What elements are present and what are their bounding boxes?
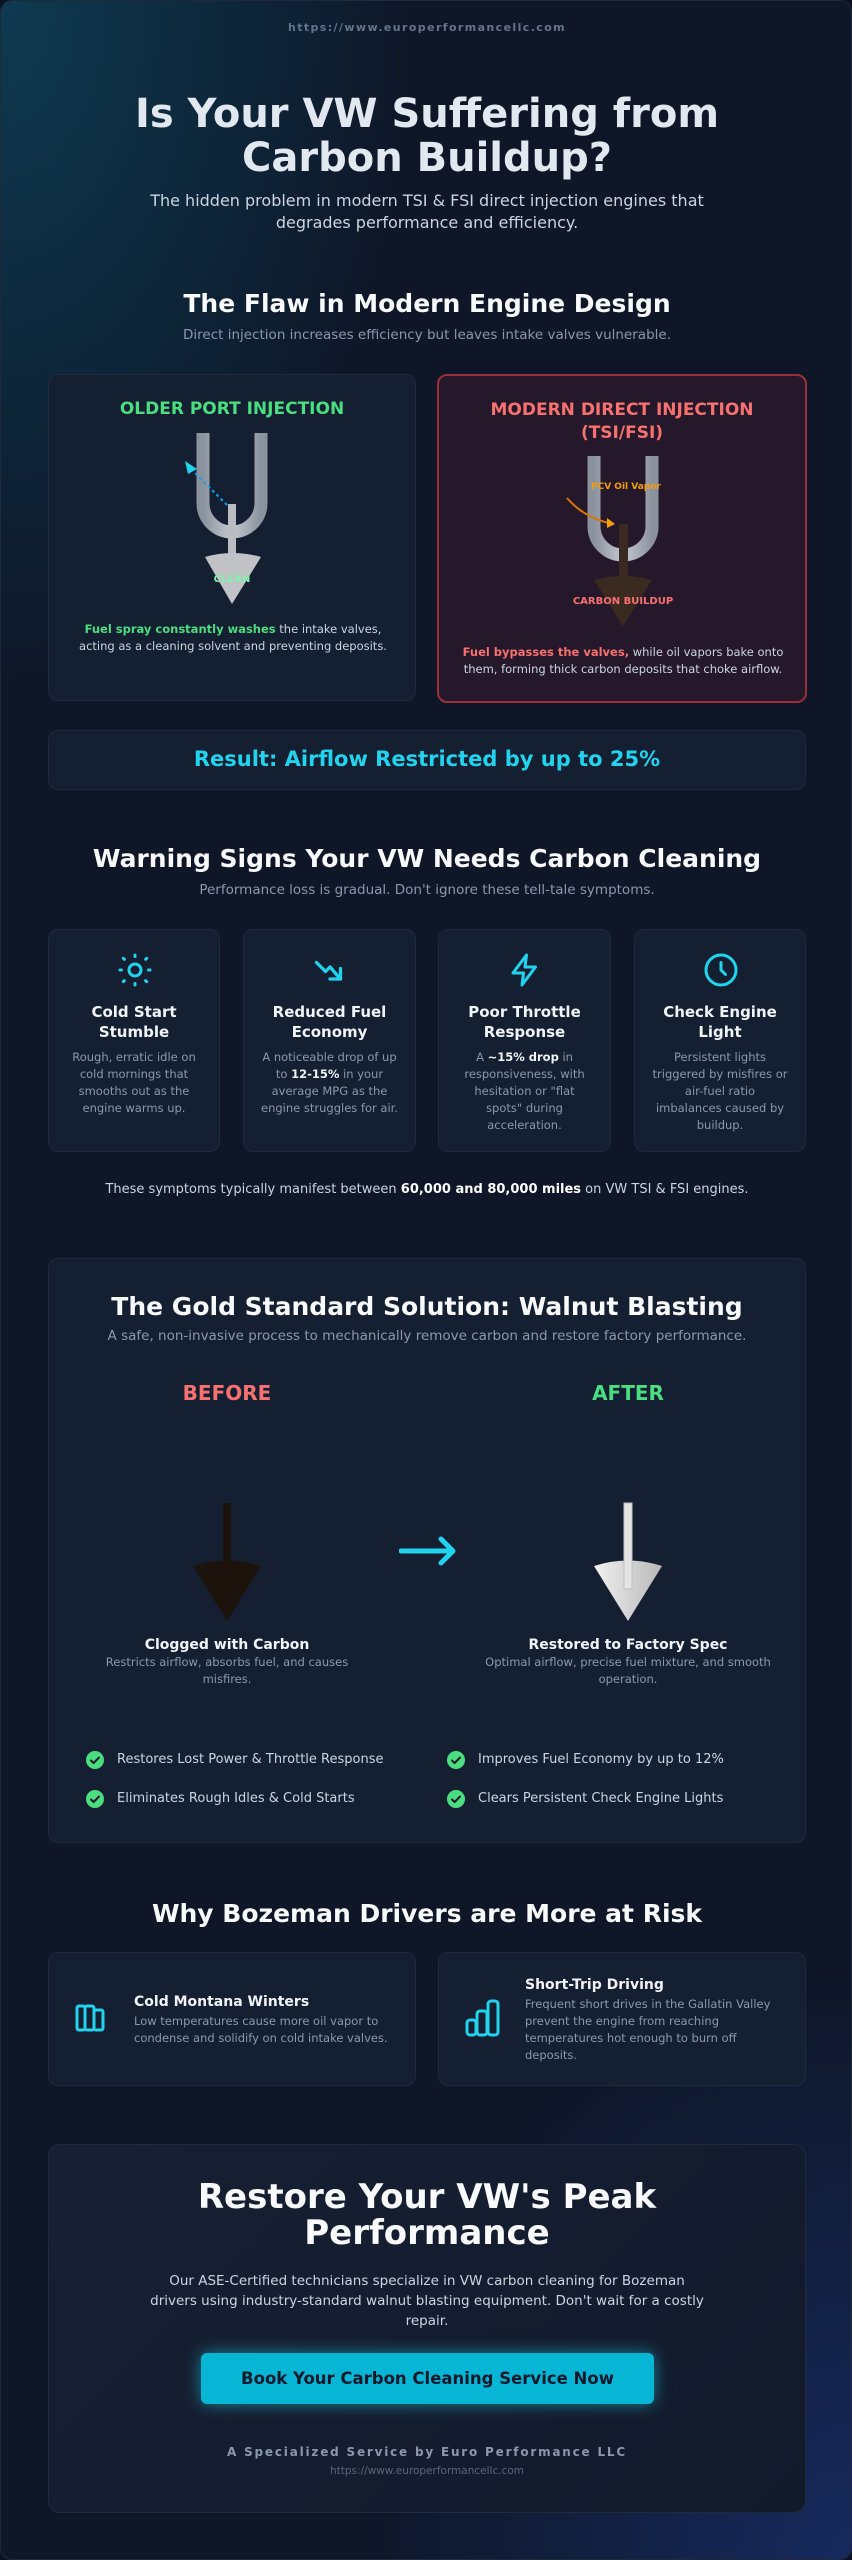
panel: port injection [48,374,416,701]
card: fuel economy: A noticeable drop of up to 12-15% in your average MPG as the engine struggles for air. [261,1050,398,1115]
button: Book Your Carbon Cleaning Service Now [241,2369,614,2388]
card: short trips: Frequent short drives in the Gallatin Valley prevent the engine from reaching temperatures hot enough to burn off deposits. [525,1997,770,2062]
diagram: carbon valve: CARBON BUILDUP [573,596,673,607]
icon: clogged valve [193,1503,261,1621]
benefit list: Improves Fuel Economy by up to 12% [478,1752,724,1767]
cta title: Performance [304,2213,550,2253]
card: cold start: Rough, erratic idle on cold mornings that smooths out as the engine warms up. [72,1050,196,1115]
button [201,2353,654,2404]
card: fuel economy: Economy [292,1023,367,1041]
card: short trips [438,1952,806,2086]
heading: flaw: The Flaw in Modern Engine Design [183,289,671,318]
card: cold winters: Cold Montana Winters [134,1994,309,2010]
card: cold start: Cold Start [91,1003,177,1021]
cta title: Restore Your VW's Peak [198,2177,656,2217]
panel: direct injection [437,374,807,703]
cta title [198,2177,657,2253]
result banner: Result: Airflow Restricted by up to 25% [194,747,660,771]
panel: walnut blasting [48,1258,806,1843]
title [135,91,719,181]
card: check engine: Persistent lights triggered by misfires or air-fuel ratio imbalances caused by buildup. [653,1050,787,1132]
benefit list: Eliminates Rough Idles & Cold Starts [117,1791,355,1806]
panel heading: MODERN DIRECT INJECTION [490,400,754,420]
label: before: BEFORE [183,1381,271,1405]
caption: after [485,1637,771,1686]
subheading: flaw: Direct injection increases efficiency but leaves intake valves vulnerable. [183,327,671,343]
icon: columns [76,2004,104,2032]
icon: lightning [511,954,538,986]
panel heading: OLDER PORT INJECTION [120,399,344,419]
panel text: Fuel spray constantly washes the intake valves, acting as a cleaning solvent and preventing deposits. [79,622,387,653]
footnote: mileage: These symptoms typically manifest between 60,000 and 80,000 miles on VW TSI & FSI engines. [105,1182,749,1197]
heading: bozeman: Why Bozeman Drivers are More at Risk [152,1899,702,1928]
subheading: warning: Performance loss is gradual. Don't ignore these tell-tale symptoms. [199,882,655,898]
panel text: Fuel bypasses the valves, while oil vapors bake onto them, forming thick carbon deposits that choke airflow. [463,645,783,676]
diagram: carbon valve: PCV Oil Vapor [591,482,661,492]
footer url: https://www.europerformancellc.com [330,2465,524,2477]
caption: before [106,1637,348,1686]
card: throttle [438,929,611,1152]
icon: bar chart [466,2000,500,2036]
benefit list: Restores Lost Power & Throttle Response [117,1752,383,1767]
label: after: AFTER [592,1381,664,1405]
icon: sun [118,954,152,986]
title: Is Your VW Suffering from [135,91,719,137]
icon: clean valve [594,1502,662,1621]
subtitle: The hidden problem in modern TSI & FSI direct injection engines that degrades performance and efficiency. [150,191,704,232]
diagram: clean valve [185,433,268,604]
card: fuel economy [243,929,416,1152]
card: fuel economy: Reduced Fuel [273,1003,386,1021]
heading: The Gold Standard Solution: Walnut Blasting [111,1292,743,1321]
heading: warning signs: Warning Signs Your VW Needs Carbon Cleaning [93,844,761,873]
caption: before: Clogged with Carbon [145,1637,309,1653]
card: cold start: Stumble [99,1023,169,1041]
card: cold winters: Low temperatures cause more oil vapor to condense and solidify on cold intake valves. [134,2014,388,2045]
panel heading [490,400,754,443]
card: throttle: Poor Throttle [468,1003,581,1021]
icon: trending down [314,960,342,981]
footer brand: A Specialized Service by Euro Performance LLC [227,2445,627,2459]
card: check engine [634,929,806,1152]
panel heading: (TSI/FSI) [581,423,663,443]
card: check engine: Light [698,1023,742,1041]
url header: https://www.europerformancellc.com [288,21,566,34]
benefit list: Clears Persistent Check Engine Lights [478,1791,723,1806]
card: cold winters [48,1952,416,2086]
panel: cta [48,2144,806,2513]
arrow [399,1536,456,1566]
card: throttle: Response [484,1023,565,1041]
diagram: clean valve: CLEAN [214,574,250,585]
title: Carbon Buildup? [242,135,612,181]
card: check engine: Check Engine [663,1003,777,1021]
caption: before: Restricts airflow, absorbs fuel, and causes misfires. [106,1655,348,1686]
benefit list [86,1751,724,1808]
card: short trips: Short-Trip Driving [525,1977,664,1993]
caption: after: Restored to Factory Spec [528,1637,728,1653]
icon: clock [704,954,738,986]
card: cold start [48,929,220,1152]
result banner [48,730,806,790]
caption: after: Optimal airflow, precise fuel mixture, and smooth operation. [485,1655,771,1686]
card: throttle: A ~15% drop in responsiveness, with hesitation or "flat spots" during acceleration. [464,1050,585,1132]
cta text: Our ASE-Certified technicians specialize in VW carbon cleaning for Bozeman drivers using industry-standard walnut blasting equipment. Don't wait for a costly repair. [150,2273,704,2329]
subheading: A safe, non-invasive process to mechanically remove carbon and restore factory performance. [108,1328,746,1344]
diagram: carbon valve [566,456,673,626]
